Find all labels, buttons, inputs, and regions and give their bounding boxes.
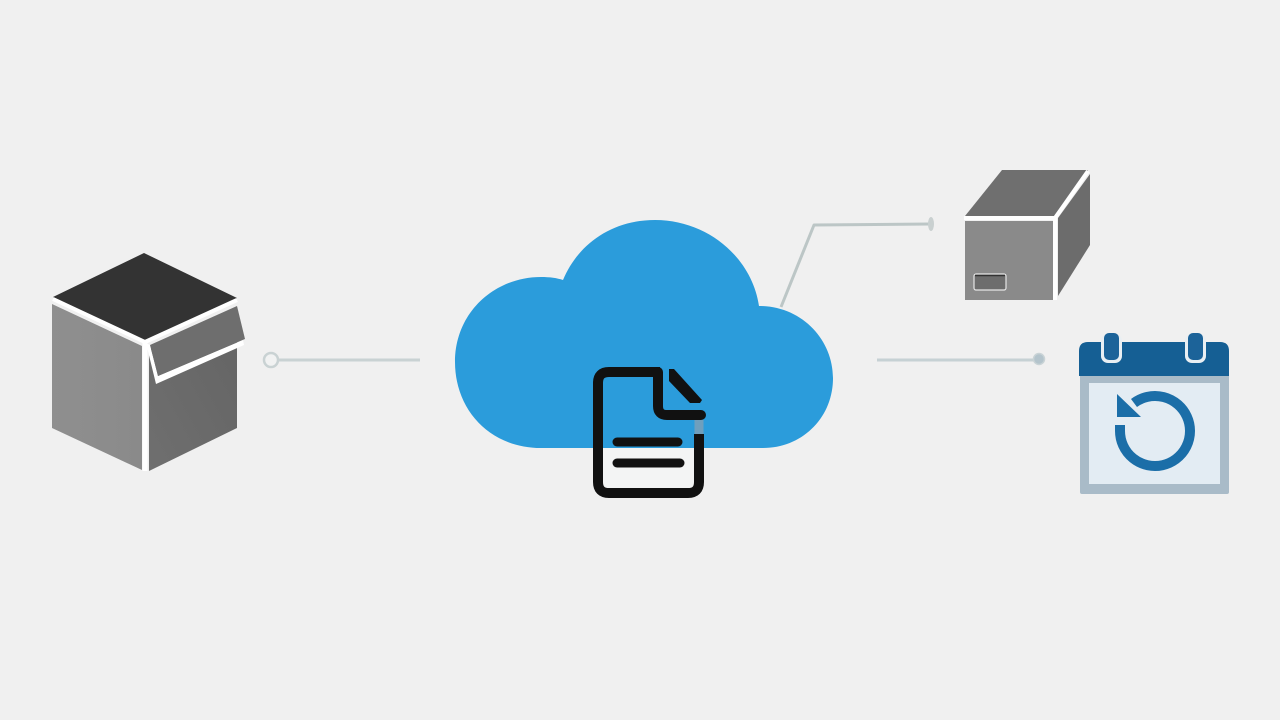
restore arrow [1117,394,1190,466]
drawer label [974,274,1006,290]
connector: box to cloud [264,353,420,367]
binder ring left [1101,333,1122,363]
icon: document [598,369,702,493]
connector: cloud to calendar [877,354,1044,364]
icon: closed server box [964,170,1090,300]
icon: calendar with restore arrow [1079,333,1229,494]
binder ring right [1185,333,1206,363]
icon: open storage box [52,253,245,471]
connector: cloud to server box [781,217,934,307]
icon: blue cloud [455,220,833,448]
